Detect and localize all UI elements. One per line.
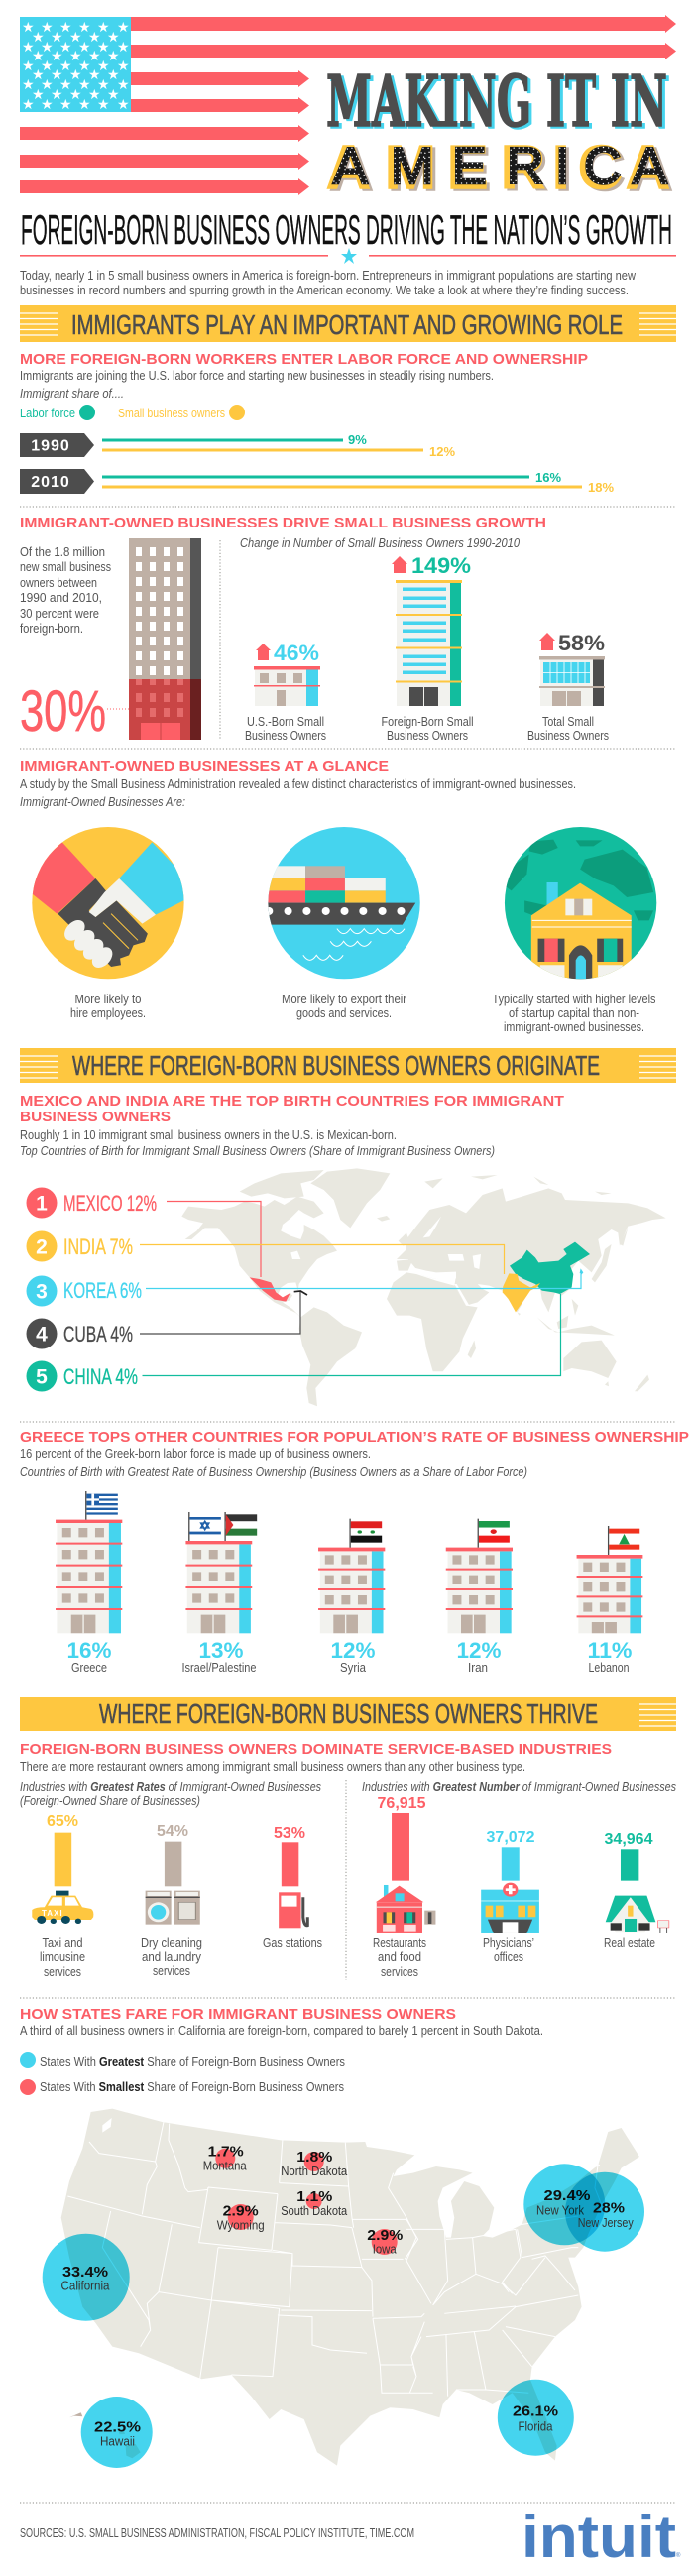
stat: lebanon: [587, 1638, 633, 1675]
section: small business growth: [20, 515, 609, 744]
caption: export: goods and services.: [296, 1005, 392, 1020]
industry: physicians offices: [481, 1829, 539, 1964]
country: cuba: [294, 1291, 307, 1295]
heading: birth countries: MEXICO AND INDIA ARE THE TOP BIRTH COUNTRIES FOR IMMIGRANT: [20, 1093, 564, 1110]
rank: mexico: [26, 1188, 157, 1218]
rank: india: 2: [36, 1235, 48, 1259]
section: service-based industries: [20, 1741, 676, 1980]
state bubble: iowa: 2.9%: [367, 2227, 403, 2244]
country: korea: [580, 1268, 583, 1274]
connector: cuba: [140, 1292, 300, 1334]
stat: iran: 12%: [456, 1638, 502, 1663]
caption: startup capital: [492, 992, 656, 1034]
building: iran: [446, 1519, 513, 1633]
flag with arrow stripes: ★★★★★★: [22, 40, 130, 56]
caption: hire employees: [70, 992, 146, 1020]
title: america marquee letters: AMERICA: [333, 138, 667, 195]
heading: at a glance: IMMIGRANT-OWNED BUSINESSES AT A GLANCE: [20, 759, 389, 775]
bars: 1990: [20, 432, 455, 459]
subheading: businesses are: Immigrant-Owned Businesses Are:: [20, 794, 185, 809]
icon: foreign-born building 149 percent: [392, 553, 471, 706]
rank: cuba: [26, 1319, 133, 1348]
state bubble: new york: New York: [536, 2202, 584, 2217]
text: 1.8 million new owners: Of the 1.8 million: [20, 544, 105, 559]
label: us-born: [245, 714, 326, 743]
stat: lebanon: Lebanon: [589, 1660, 629, 1675]
chart title: change in owners: Change in Number of Small Business Owners 1990-2010: [240, 535, 521, 550]
heading: birth countries: [20, 1093, 564, 1125]
caption: startup capital: Typically started with higher levels: [492, 992, 656, 1006]
text: 1.8 million new owners: 1990 and 2010,: [20, 590, 102, 605]
state bubble: california: California: [61, 2279, 110, 2292]
subheading: greatest rates: (Foreign-Owned Share of Businesses): [20, 1793, 200, 1808]
state bubble: new jersey: [565, 2172, 644, 2252]
stat: iran: Iran: [468, 1660, 488, 1675]
text: 1.8 million new owners: foreign-born.: [20, 621, 83, 636]
industry: taxi: services: [44, 1964, 81, 1979]
text: 1.8 million new owners: owners between: [20, 575, 97, 590]
icon: total building 58 percent: 58%: [558, 631, 605, 655]
industry: restaurants: 76,915: [378, 1795, 426, 1812]
label: foreign-born: Business Owners: [387, 728, 468, 743]
state bubble: south dakota: [281, 2188, 348, 2218]
section: state comparison: [20, 2006, 644, 2468]
section: at a glance: [18, 759, 656, 1034]
title: america marquee letters: AMERICA: [333, 138, 667, 195]
connector: china: [143, 1294, 561, 1376]
bars: 1990: 1990: [31, 438, 70, 454]
description: california and south dakota: A third of all business owners in California are foreign-born, compared to barely 1 percent in South Dakota.: [20, 2023, 543, 2038]
state bubble: north dakota: North Dakota: [281, 2164, 348, 2178]
industry: dry cleaning: 54%: [157, 1823, 188, 1840]
united states map: [61, 2109, 639, 2466]
flag with arrow stripes: ★★★★★★: [22, 97, 130, 113]
state bubble: wyoming: [217, 2202, 265, 2233]
state bubble: new york: [523, 2164, 605, 2245]
industry: taxi: 65%: [47, 1814, 78, 1830]
rank: china: [26, 1360, 138, 1392]
state bubble: california: [43, 2234, 130, 2321]
bars: 2010: 16%: [535, 470, 561, 485]
state bubble: new york: 29.4%: [543, 2187, 591, 2204]
connector: india: [140, 1245, 504, 1274]
icon: foreign-born building 149 percent: 149%: [411, 553, 471, 578]
industry: real estate: [604, 1831, 669, 1950]
logo: intuit: intuit: [522, 2504, 676, 2570]
heading: service industries: FOREIGN-BORN BUSINESS OWNERS DOMINATE SERVICE-BASED INDUSTRIES: [20, 1741, 612, 1758]
stat: syria: [331, 1638, 375, 1675]
state bubble: hawaii: 22.5%: [94, 2419, 141, 2436]
stat: iran: [456, 1638, 502, 1675]
stat: israel and palestine: [182, 1638, 256, 1675]
state bubble: montana: 1.7%: [208, 2143, 244, 2160]
industry: physicians offices: Physicians’: [483, 1935, 534, 1950]
industry: dry cleaning: Dry cleaning: [141, 1935, 202, 1950]
connector: korea: [146, 1274, 581, 1289]
flag with arrow stripes: ★★★★★★: [22, 20, 130, 36]
icon: cargo ship: [263, 827, 420, 979]
text: 1.8 million new owners: new small business: [20, 559, 111, 574]
title: america marquee letters: AMERICA: [326, 134, 670, 202]
building: israel and palestine: [185, 1512, 257, 1633]
rank: china: CHINA 4%: [63, 1364, 138, 1389]
connector: mexico: [167, 1202, 261, 1277]
bars: 2010: 18%: [588, 480, 614, 495]
state bubble: wyoming: 2.9%: [223, 2202, 259, 2219]
country: china: [510, 1242, 590, 1294]
building: lebanon: [577, 1526, 642, 1633]
stat: greece: Greece: [71, 1660, 107, 1675]
industry: taxi: limousine: [40, 1949, 85, 1964]
label: us-born: U.S.-Born Small: [247, 714, 324, 729]
section: rate of business ownership: [20, 1429, 689, 1675]
caption: hire employees: More likely to: [75, 992, 141, 1006]
industry: taxi: Taxi and: [42, 1935, 83, 1950]
caption: startup capital: immigrant-owned businesses.: [504, 1019, 644, 1034]
heading: states: HOW STATES FARE FOR IMMIGRANT BUSINESS OWNERS: [20, 2006, 456, 2023]
industry: gas stations: Gas stations: [263, 1935, 322, 1950]
chart subtitle: Immigrant share of....: [20, 386, 124, 401]
state bubble: california: 33.4%: [62, 2264, 108, 2281]
state bubble: hawaii: Hawaii: [100, 2434, 135, 2449]
text: 1.8 million new owners: 30 percent were: [20, 606, 99, 621]
flag with arrow stripes: ★★★★★★: [22, 59, 130, 74]
flag with arrow stripes: [20, 15, 676, 195]
state bubble: montana: Montana: [203, 2158, 247, 2172]
industry: gas stations: 53%: [274, 1825, 305, 1842]
industry: dry cleaning: services: [153, 1963, 190, 1978]
industry: taxi: TAXI: [42, 1909, 63, 1918]
flag with arrow stripes: ★★★★★★: [22, 77, 130, 93]
flag with arrow stripes: ★★★★★: [32, 30, 120, 46]
caption: hire employees: hire employees.: [70, 1005, 146, 1020]
stat: israel and palestine: Israel/Palestine: [182, 1660, 256, 1675]
stat: israel and palestine: 13%: [198, 1638, 244, 1663]
stat: greece: 16%: [67, 1638, 111, 1663]
country: india: [503, 1273, 540, 1312]
state bubble: florida: [498, 2380, 574, 2456]
industry: dry cleaning: [141, 1823, 202, 1978]
bars: 1990: 12%: [429, 444, 455, 459]
rank: korea: 3: [36, 1281, 48, 1303]
logo: intuit: ®: [676, 2552, 681, 2559]
heading: growth: IMMIGRANT-OWNED BUSINESSES DRIVE SMALL BUSINESS GROWTH: [20, 515, 546, 531]
legend: small business owners: Small business owners: [118, 406, 225, 420]
icon: us-born building 46 percent: [254, 641, 320, 706]
chart subtitle: countries of birth: Countries of Birth with Greatest Rate of Business Ownership (Business Owners as a Share of Labor Force): [20, 1464, 527, 1479]
building: greece: [56, 1491, 122, 1633]
subheading: greatest rates: Industries with Greatest Rates of Immigrant-Owned Businesses: [20, 1779, 321, 1794]
rank: korea: [26, 1275, 142, 1307]
state bubble: south dakota: South Dakota: [281, 2203, 348, 2218]
label: us-born: Business Owners: [245, 728, 326, 743]
rank: korea: KOREA 6%: [63, 1278, 142, 1303]
label: foreign-born: [381, 714, 474, 743]
state bubble: florida: Florida: [518, 2419, 553, 2434]
state bubble: hawaii: [81, 2397, 153, 2468]
bars: 2010: [20, 469, 614, 495]
chart subtitle: top countries: Top Countries of Birth for Immigrant Small Business Owners (Share of Immigrant Business Owners): [20, 1143, 495, 1158]
industry: physicians offices: offices: [494, 1949, 523, 1964]
industry: dry cleaning: and laundry: [142, 1949, 201, 1964]
flag with arrow stripes: ★★★★★: [32, 87, 120, 103]
state bubble: florida: 26.1%: [513, 2403, 558, 2420]
industry: physicians offices: 37,072: [487, 1829, 535, 1846]
country: mexico: [250, 1277, 290, 1302]
legend: labor force: Labor force: [20, 406, 75, 420]
subheading: greatest rates: [20, 1779, 321, 1808]
industry: gas stations: [263, 1825, 322, 1950]
description: restaurant owners: There are more restaurant owners among immigrant small business owners than any other business type.: [20, 1759, 525, 1774]
flag with arrow stripes: ★★★★★: [32, 49, 120, 64]
rank: cuba: 4: [36, 1323, 48, 1347]
icon: handshake: [32, 827, 184, 980]
description: greek-born: 16 percent of the Greek-born labor force is made up of business owners.: [20, 1446, 371, 1461]
rank: india: [26, 1231, 133, 1261]
state bubble: new jersey: 28%: [593, 2200, 625, 2217]
industry: restaurants: Restaurants: [373, 1935, 426, 1950]
stat: syria: Syria: [340, 1660, 367, 1675]
legend: smallest share: States With Smallest Share of Foreign-Born Business Owners: [40, 2079, 344, 2094]
rank: mexico: 1: [36, 1192, 48, 1216]
world map: [140, 1168, 666, 1406]
caption: export: More likely to export their: [282, 992, 407, 1006]
industry: real estate: 34,964: [605, 1831, 653, 1848]
heading: labor force: MORE FOREIGN-BORN WORKERS ENTER LABOR FORCE AND OWNERSHIP: [20, 351, 588, 368]
label: foreign-born: Foreign-Born Small: [381, 714, 474, 729]
building: syria: [318, 1519, 385, 1633]
heading: birth countries: BUSINESS OWNERS: [20, 1109, 171, 1125]
description: labor force: Immigrants are joining the U.S. labor force and starting new businesses in steadily rising numbers.: [20, 368, 494, 383]
industry: restaurants: and food: [378, 1949, 421, 1964]
section: top birth countries: [20, 1093, 666, 1406]
industry: real estate: Real estate: [604, 1935, 655, 1950]
state bubble: wyoming: Wyoming: [217, 2218, 265, 2233]
caption: export: [282, 992, 407, 1020]
state bubble: montana: [203, 2143, 247, 2172]
tall building with 30 percent shaded: [129, 538, 201, 740]
icon: total building 58 percent: [539, 631, 605, 706]
state bubble: new jersey: New Jersey: [578, 2215, 634, 2230]
rank: cuba: CUBA 4%: [63, 1322, 133, 1347]
icon: globe and house: [505, 827, 656, 982]
section: labor force and ownership: [20, 351, 614, 495]
description: study: A study by the Small Business Administration revealed a few distinct characteristics of immigrant-owned businesses.: [20, 776, 576, 791]
legend: greatest share: States With Greatest Share of Foreign-Born Business Owners: [40, 2054, 345, 2069]
star divider: [20, 248, 676, 264]
state bubble: iowa: [367, 2227, 403, 2257]
stat: syria: 12%: [331, 1638, 375, 1663]
rank: india: INDIA 7%: [63, 1234, 133, 1259]
rank: china: 5: [36, 1366, 48, 1388]
industry: restaurants: [373, 1795, 435, 1979]
rank: mexico: MEXICO 12%: [63, 1191, 157, 1216]
sources: SOURCES: U.S. SMALL BUSINESS ADMINISTRATION, FISCAL POLICY INSTITUTE, TIME.COM: [20, 2525, 414, 2540]
heading: greece: GREECE TOPS OTHER COUNTRIES FOR POPULATION’S RATE OF BUSINESS OWNERSHIP: [20, 1429, 689, 1446]
label: total: Total Small: [542, 714, 594, 729]
caption: startup capital: of startup capital than non-: [509, 1005, 639, 1020]
label: total: Business Owners: [527, 728, 609, 743]
flag with arrow stripes: ★★★★★: [32, 67, 120, 83]
stat: greece: [67, 1638, 111, 1675]
industry: restaurants: services: [381, 1964, 418, 1979]
bars: 1990: 9%: [348, 432, 367, 447]
state bubble: south dakota: 1.1%: [296, 2188, 332, 2205]
bars: 2010: 2010: [31, 474, 70, 491]
text: 1.8 million new owners: [20, 544, 111, 636]
state bubble: iowa: Iowa: [373, 2242, 397, 2257]
label: total: [527, 714, 609, 743]
stat: lebanon: 11%: [587, 1638, 633, 1663]
intro paragraph: [20, 268, 637, 297]
industry: taxi: [32, 1814, 93, 1979]
description: mexican-born: Roughly 1 in 10 immigrant small business owners in the U.S. is Mexican-born.: [20, 1127, 397, 1142]
state bubble: north dakota: 1.8%: [296, 2149, 332, 2166]
state bubble: north dakota: [281, 2149, 348, 2178]
big number: 30 percent: 30%: [20, 679, 106, 744]
icon: us-born building 46 percent: 46%: [274, 641, 319, 665]
